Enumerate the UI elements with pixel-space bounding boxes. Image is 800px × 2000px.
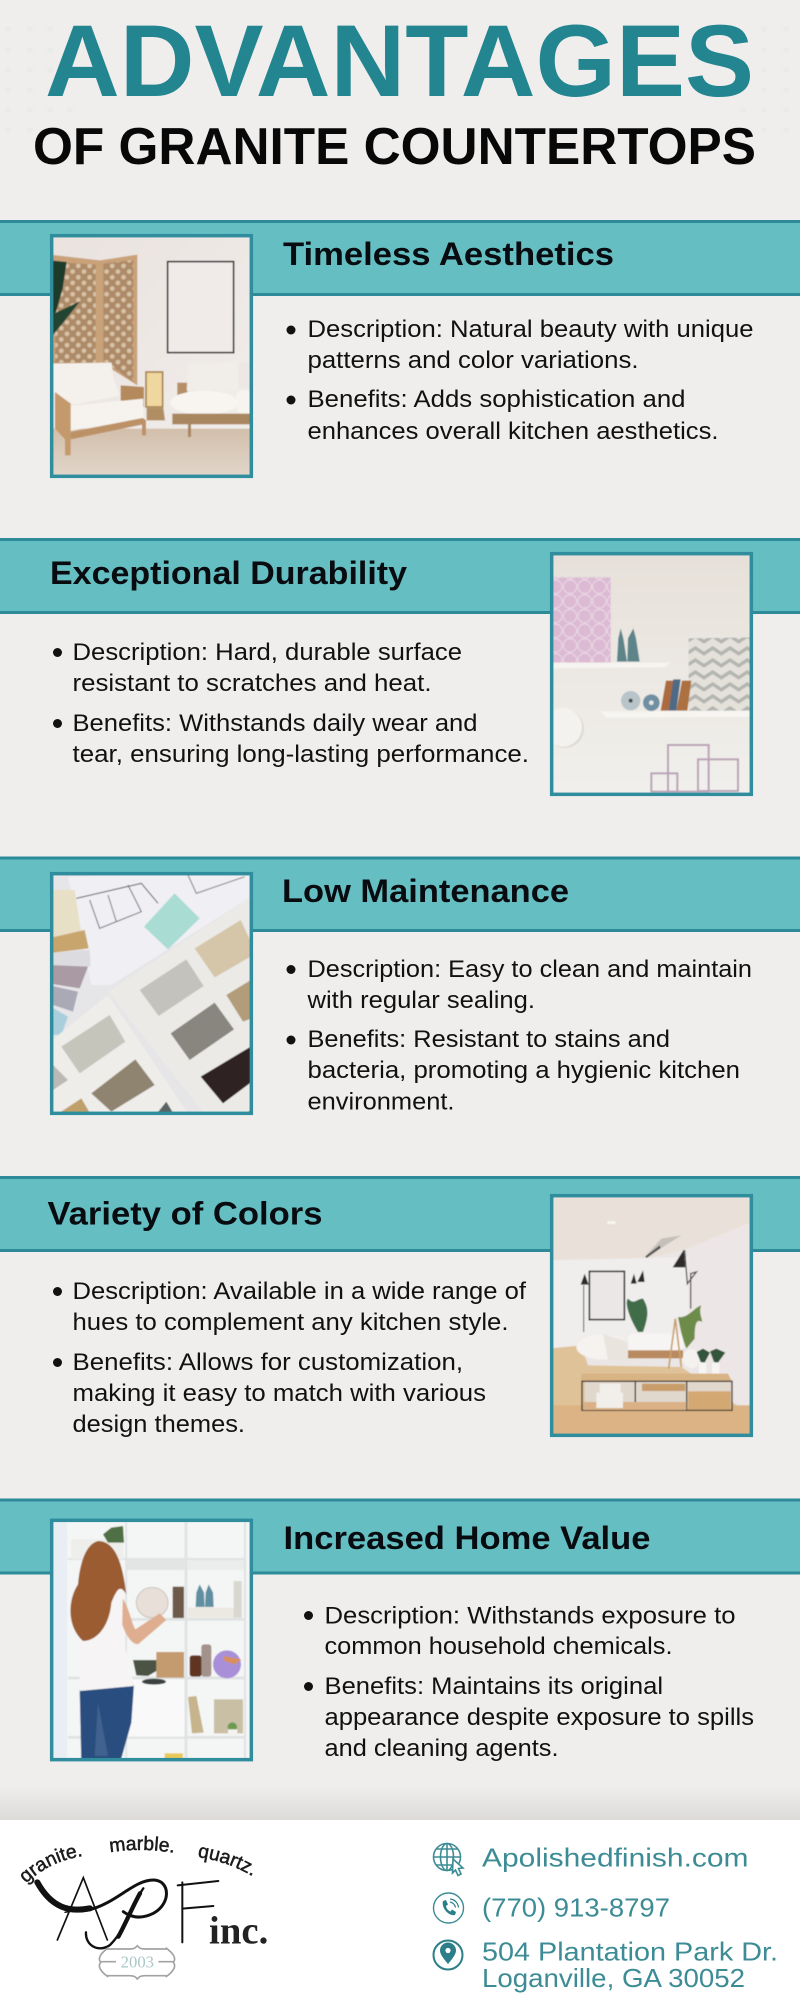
bullet list: resistant to scratches and heat. [72, 670, 432, 697]
panel: exceptional durability [0, 538, 800, 798]
bullet list [53, 1278, 526, 1438]
company logo [21, 1836, 268, 1980]
heading: Exceptional Durability [50, 555, 407, 591]
bullet list: bacteria, promoting a hygienic kitchen [308, 1057, 740, 1084]
heading band [0, 856, 800, 932]
photo frame [52, 236, 251, 476]
heading band [0, 1498, 800, 1574]
bullet list [304, 1602, 754, 1762]
footer [0, 1820, 800, 2000]
decorative dot pattern right [740, 26, 789, 133]
icon: location pin [434, 1940, 462, 1970]
photo frame [552, 1196, 751, 1435]
bullet list [286, 956, 752, 1116]
contact: phone: (770) 913-8797 [482, 1892, 670, 1922]
bullet list: with regular sealing. [306, 987, 535, 1014]
logo tagline: marble. [110, 1836, 173, 1853]
bullet list: Benefits: Adds sophistication and [308, 386, 686, 413]
heading: Variety of Colors [48, 1196, 322, 1232]
bullet list: Benefits: Allows for customization, [72, 1349, 463, 1376]
photo: wall shelves [543, 550, 756, 798]
contact: website [434, 1842, 748, 1876]
photo frame [552, 554, 751, 794]
decorative dot pattern left [5, 26, 73, 133]
bullet list: Description: Easy to clean and maintain [308, 956, 752, 983]
bullet list: hues to complement any kitchen style. [72, 1309, 508, 1336]
icon: phone [434, 1893, 464, 1923]
bullet list: and cleaning agents. [324, 1735, 558, 1762]
logo year badge [99, 1946, 175, 1979]
heading: Increased Home Value [284, 1520, 650, 1556]
logo tagline [21, 1836, 253, 1885]
photo frame [52, 1520, 251, 1760]
logo year badge: 2003 [121, 1953, 154, 1972]
bullet list: Description: Hard, durable surface [72, 639, 462, 666]
heading: Low Maintenance [282, 873, 569, 909]
bullet list [53, 639, 529, 768]
photo: bedroom [548, 1192, 756, 1440]
bullet list [286, 316, 754, 445]
heading band [0, 538, 800, 614]
address text: Loganville, GA 30052 [482, 1963, 745, 1993]
bullet list: Benefits: Maintains its original [324, 1673, 663, 1700]
bullet list: Description: Natural beauty with unique [308, 316, 754, 343]
bottom shadow [0, 1785, 800, 1820]
bullet list: tear, ensuring long-lasting performance. [72, 741, 529, 768]
bullet list: enhances overall kitchen aesthetics. [308, 418, 718, 445]
heading band [0, 1176, 800, 1252]
bullet list: environment. [308, 1088, 454, 1116]
contact: address [434, 1936, 778, 1993]
subtitle: OF GRANITE COUNTERTOPS [33, 118, 756, 176]
photo: woman at shelves [48, 1516, 256, 1764]
panel: low maintenance [0, 856, 800, 1118]
logo tagline: quartz. [198, 1847, 253, 1876]
panel: timeless aesthetics [0, 220, 800, 480]
bullet list: common household chemicals. [324, 1633, 672, 1660]
heading: Timeless Aesthetics [283, 236, 614, 272]
logo monogram APF [37, 1878, 218, 1948]
title: ADVANTAGES [45, 4, 754, 118]
contact: website: Apolishedfinish.com [482, 1842, 748, 1872]
photo: material samples [48, 870, 256, 1118]
bullet list: Description: Withstands exposure to [324, 1602, 736, 1630]
bullet list: Benefits: Withstands daily wear and [72, 710, 478, 737]
heading band [0, 220, 800, 296]
icon: globe [434, 1844, 463, 1876]
panel: increased home value [0, 1498, 800, 1764]
panel: variety of colors [0, 1176, 800, 1440]
bullet list: appearance despite exposure to spills [324, 1704, 754, 1731]
photo: living room [50, 232, 257, 480]
bullet list: design themes. [72, 1411, 245, 1438]
bullet list: making it easy to match with various [72, 1380, 486, 1407]
logo tagline: granite. [21, 1848, 82, 1885]
bullet list: Benefits: Resistant to stains and [308, 1026, 670, 1053]
photo frame [52, 874, 251, 1113]
logo inc: inc. [209, 1911, 268, 1953]
bullet list: patterns and color variations. [308, 347, 638, 374]
address text [482, 1936, 778, 1993]
address text: 504 Plantation Park Dr. [482, 1936, 778, 1966]
bullet list: Description: Available in a wide range of [72, 1278, 526, 1305]
